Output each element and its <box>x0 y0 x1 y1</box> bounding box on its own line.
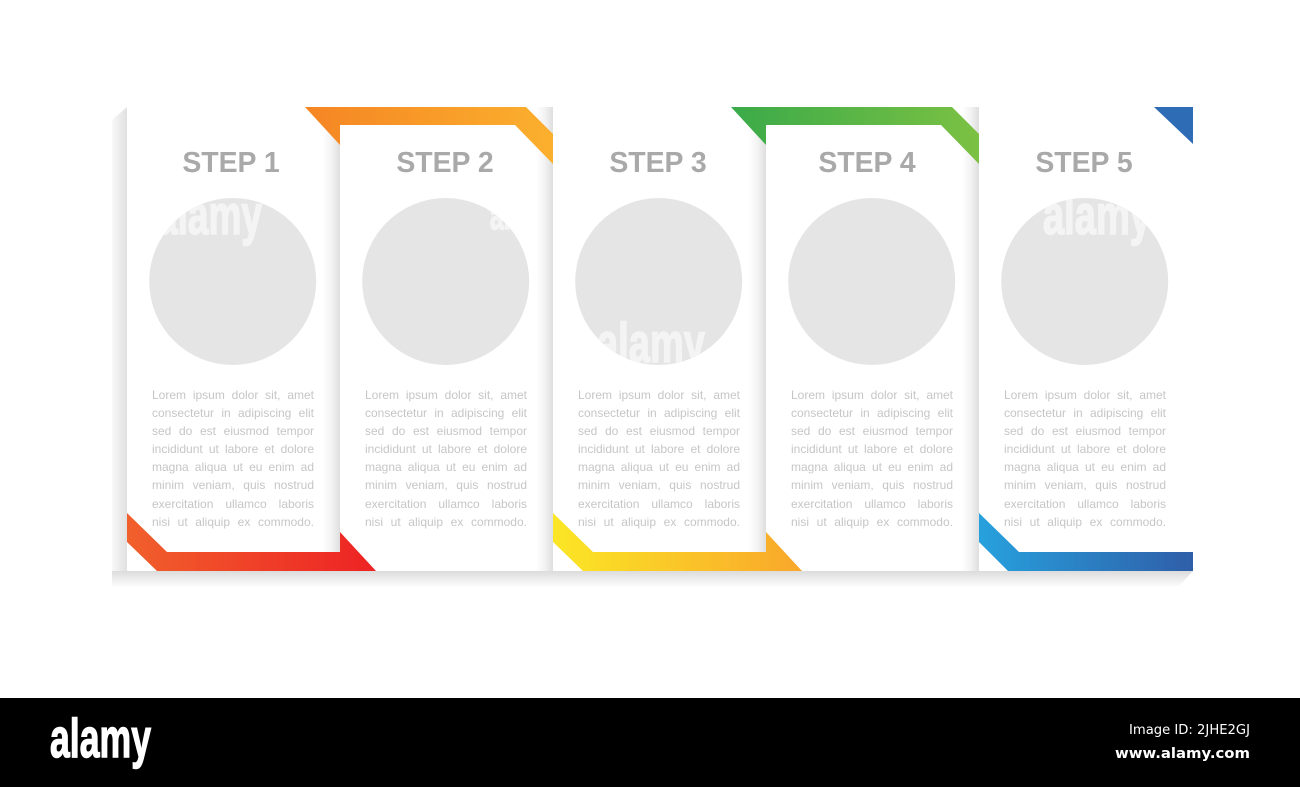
text block: step 5: Lorem ipsum dolor sit, amet <box>1004 388 1166 402</box>
ribbon: blue bottom <box>979 513 1193 571</box>
image id: Image ID: 2JHE2GJ <box>1129 723 1250 738</box>
text block: step 1 <box>152 388 314 529</box>
image placeholder circle 5 <box>1001 198 1168 365</box>
panel: step 4 <box>766 107 979 571</box>
ribbon: yellow <box>553 513 802 571</box>
image placeholder circle 4 <box>788 198 956 365</box>
text block: step 3: magna aliqua ut eu enim ad <box>578 460 740 474</box>
text block: step 1: nisi ut aliquip ex commodo. <box>152 515 314 529</box>
text block: step 5: nisi ut aliquip ex commodo. <box>1004 515 1166 529</box>
heading: step 3: STEP 3 <box>609 147 707 179</box>
text block: step 3: consectetur in adipiscing elit <box>578 406 740 420</box>
text block: step 4: nisi ut aliquip ex commodo. <box>791 515 953 529</box>
image placeholder circle 1: alamy <box>157 183 262 246</box>
heading: step 4: STEP 4 <box>818 147 916 179</box>
text block: step 4: consectetur in adipiscing elit <box>791 406 953 420</box>
text block: step 3 <box>578 388 740 529</box>
text block: step 3: exercitation ullamco laboris <box>578 497 740 511</box>
panel: step 1 <box>149 134 340 552</box>
text block: step 2: exercitation ullamco laboris <box>365 497 527 511</box>
text block: step 3: minim veniam, quis nostrud <box>578 478 740 492</box>
text block: step 2 <box>365 388 527 529</box>
image placeholder circle 3: alamy <box>597 311 705 374</box>
image placeholder circle 5: alamy <box>1043 183 1151 246</box>
image placeholder circle 1 <box>149 198 316 365</box>
text block: step 5: exercitation ullamco laboris <box>1004 497 1166 511</box>
text block: step 2: nisi ut aliquip ex commodo. <box>365 515 527 529</box>
text block: step 5: consectetur in adipiscing elit <box>1004 406 1166 420</box>
text block: step 2: Lorem ipsum dolor sit, amet <box>365 388 527 402</box>
text block: step 4: sed do est eiusmod tempor <box>791 424 953 438</box>
ribbon: red <box>127 513 376 571</box>
footer bar <box>0 698 1300 787</box>
ribbon: blue corner <box>1154 107 1193 144</box>
panel: step 3 <box>575 134 766 552</box>
text block: step 1: exercitation ullamco laboris <box>152 497 314 511</box>
text block: step 1: Lorem ipsum dolor sit, amet <box>152 388 314 402</box>
text block: step 1: consectetur in adipiscing elit <box>152 406 314 420</box>
text block: step 2: minim veniam, quis nostrud <box>365 478 527 492</box>
text block: step 2: magna aliqua ut eu enim ad <box>365 460 527 474</box>
text block: step 3: Lorem ipsum dolor sit, amet <box>578 388 740 402</box>
text block: step 4: minim veniam, quis nostrud <box>791 478 953 492</box>
text block: step 2: sed do est eiusmod tempor <box>365 424 527 438</box>
text block: step 4: magna aliqua ut eu enim ad <box>791 460 953 474</box>
ribbon: green <box>731 107 979 164</box>
text block: step 5: incididunt ut labore et dolore <box>1004 442 1166 456</box>
text block: step 5: magna aliqua ut eu enim ad <box>1004 460 1166 474</box>
text block: step 5: minim veniam, quis nostrud <box>1004 478 1166 492</box>
footer logo: alamy <box>50 707 151 769</box>
text block: step 5: sed do est eiusmod tempor <box>1004 424 1166 438</box>
text block: step 4: Lorem ipsum dolor sit, amet <box>791 388 953 402</box>
text block: step 1: incididunt ut labore et dolore <box>152 442 314 456</box>
heading: step 1: STEP 1 <box>182 147 280 179</box>
panel: step 2 <box>362 107 553 571</box>
text block: step 1: sed do est eiusmod tempor <box>152 424 314 438</box>
text block: step 3: sed do est eiusmod tempor <box>578 424 740 438</box>
image placeholder circle 2 <box>362 198 530 365</box>
text block: step 4: incididunt ut labore et dolore <box>791 442 953 456</box>
text block: step 3: nisi ut aliquip ex commodo. <box>578 515 740 529</box>
text block: step 4: exercitation ullamco laboris <box>791 497 953 511</box>
text block: step 2: consectetur in adipiscing elit <box>365 406 527 420</box>
text block: step 3: incididunt ut labore et dolore <box>578 442 740 456</box>
text block: step 1: magna aliqua ut eu enim ad <box>152 460 314 474</box>
text block: step 4 <box>791 388 953 529</box>
panel: step 5 <box>1001 152 1168 528</box>
heading: step 5: STEP 5 <box>1035 147 1133 179</box>
image placeholder circle 3 <box>575 198 742 365</box>
text block: step 1: minim veniam, quis nostrud <box>152 478 314 492</box>
text block: step 5 <box>1004 388 1166 529</box>
heading: step 2: STEP 2 <box>396 147 494 179</box>
text block: step 2: incididunt ut labore et dolore <box>365 442 527 456</box>
ribbon: orange <box>305 107 553 164</box>
website: www.alamy.com <box>1115 745 1250 762</box>
image placeholder circle 2: alamy <box>490 194 560 238</box>
